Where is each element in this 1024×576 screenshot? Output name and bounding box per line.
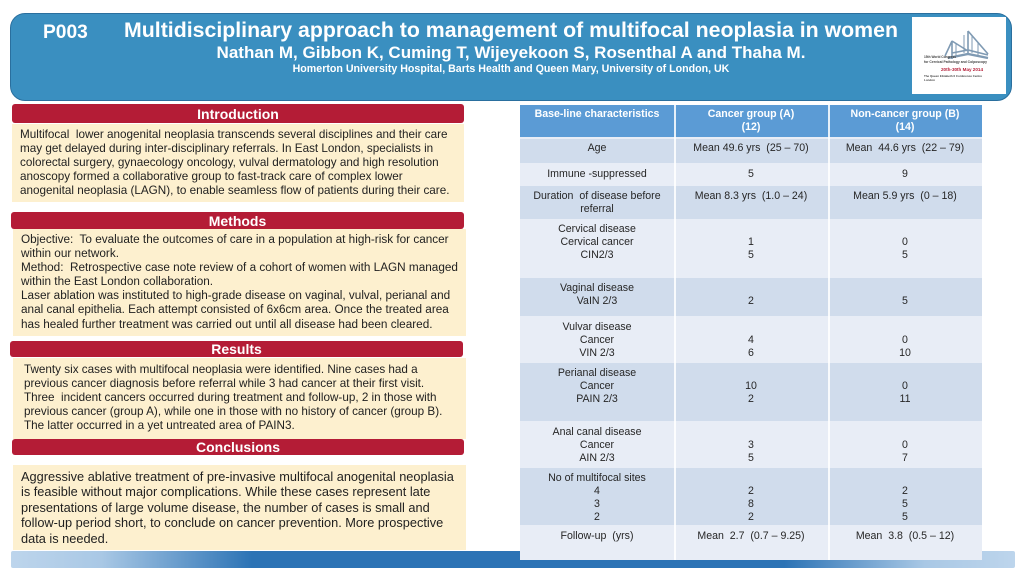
methods body	[21, 233, 458, 331]
heading: Introduction: Introduction	[197, 106, 279, 122]
row: multifocal sites: 3	[594, 498, 600, 510]
row: cervical disease: 5	[902, 249, 908, 261]
table: baseline characteristics	[520, 105, 982, 560]
row: perianal disease	[520, 363, 982, 421]
introduction body: may get delayed during inter-disciplinary referrals. In East London, specialists in	[20, 142, 433, 155]
heading: Introduction	[12, 104, 464, 123]
row: perianal disease: 0	[902, 380, 908, 392]
title: Multidisciplinary approach to management of multifocal neoplasia in women	[124, 18, 898, 42]
row: vaginal disease: VaIN 2/3	[577, 295, 617, 307]
row: vulvar disease: 4	[748, 334, 754, 346]
conference logo: London	[924, 78, 935, 82]
row: anal canal disease: 0	[902, 439, 908, 451]
row: vaginal disease: Vaginal disease	[560, 282, 634, 294]
row: vaginal disease: 5	[902, 295, 908, 307]
methods body: within the East London collaboration.	[21, 275, 213, 288]
conclusions body: follow-up period short, to conclude on cancer prevention. More prospective	[21, 515, 443, 530]
methods body: anal canal epithelia. Each attempt consisted of 6x6cm area. Once the treated area	[21, 303, 449, 316]
row: perianal disease: PAIN 2/3	[576, 393, 618, 405]
results body: previous cancer (group A), while one in those with no history of cancer (group B).	[24, 405, 442, 418]
row: follow-up: Mean 3.8 (0.5 – 12)	[856, 530, 954, 542]
row: anal canal disease: 7	[902, 452, 908, 464]
conclusions body: is feasible without major complications. While these cases represent late	[21, 484, 430, 499]
table header row: Non-cancer group (B)	[851, 108, 959, 120]
row: anal canal disease: 5	[748, 452, 754, 464]
authors: Nathan M, Gibbon K, Cuming T, Wijeyekoon S, Rosenthal A and Thaha M.	[217, 43, 805, 62]
panel: introduction text	[12, 124, 464, 202]
row: follow-up: Mean 2.7 (0.7 – 9.25)	[697, 530, 805, 542]
results body: Twenty six cases with multifocal neoplasia were identified. Nine cases had a	[24, 363, 418, 376]
row: vulvar disease: 6	[748, 347, 754, 359]
row: multifocal sites: 5	[902, 511, 908, 523]
table header row: Base-line characteristics	[535, 108, 659, 120]
conference logo: 20th-30th May 2014	[941, 67, 983, 72]
row: multifocal sites: 2	[594, 511, 600, 523]
heading: Methods: Methods	[209, 213, 266, 229]
methods body: within our network.	[21, 247, 119, 260]
row: anal canal disease	[520, 422, 982, 467]
conclusions body: Aggressive ablative treatment of pre-invasive multifocal anogenital neoplasia	[21, 469, 454, 484]
row: vulvar disease: VIN 2/3	[579, 347, 615, 359]
row: age: Age	[588, 142, 606, 154]
introduction body: colorectal surgery, gynaecology oncology, vulval dermatology and high resolution	[20, 156, 439, 169]
row: anal canal disease: Cancer	[580, 439, 614, 451]
row: duration: Mean 5.9 yrs (0 – 18)	[853, 190, 957, 202]
row: vaginal disease	[520, 278, 982, 316]
results body	[24, 363, 442, 432]
conclusions body: data is needed.	[21, 531, 108, 546]
row: duration: Duration of disease before	[533, 190, 661, 202]
results body: The latter occurred in a yet untreated area of PAIN3.	[24, 419, 295, 432]
introduction body: Multifocal lower anogenital neoplasia transcends several disciplines and their care	[20, 128, 447, 141]
row: cervical disease: 5	[748, 249, 754, 261]
row: cervical disease: 0	[902, 236, 908, 248]
conference logo	[912, 17, 1006, 94]
row: multifocal sites: 2	[748, 485, 754, 497]
conference logo: for Cervical Pathology and Colposcopy	[924, 60, 987, 64]
heading: Conclusions	[12, 439, 464, 455]
results body: Three incident cancers occurred during treatment and follow-up, 2 in those with	[24, 391, 437, 404]
row: multifocal sites: 2	[748, 511, 754, 523]
table header row: (12)	[742, 121, 760, 133]
header banner	[10, 13, 1012, 101]
introduction body: anogenital neoplasia (LAGN), to enable seamless flow of patients during their care.	[20, 184, 449, 197]
table header row: (14)	[896, 121, 914, 133]
methods body: Method: Retrospective case note review of a cohort of women with LAGN managed	[21, 261, 458, 274]
introduction body: anoscopy formed a collaborative group to fast-track care of complex lower	[20, 170, 403, 183]
icon: tower bridge	[945, 31, 988, 59]
introduction body	[20, 128, 449, 197]
row: age	[520, 139, 982, 163]
conclusions body: presentations of large volume disease, the number of cases is small and	[21, 500, 430, 515]
row: age: Mean 44.6 yrs (22 – 79)	[846, 142, 964, 154]
row: perianal disease: Cancer	[580, 380, 614, 392]
table header row: Cancer group (A)	[708, 108, 794, 120]
row: cervical disease: Cervical cancer	[560, 236, 634, 248]
affiliation: Homerton University Hospital, Barts Health and Queen Mary, University of London, UK	[293, 63, 729, 75]
footer gradient bar	[11, 551, 1015, 568]
row: duration: Mean 8.3 yrs (1.0 – 24)	[695, 190, 807, 202]
row: cervical disease	[520, 220, 982, 277]
heading: Methods	[11, 212, 464, 229]
methods body: Objective: To evaluate the outcomes of care in a population at high-risk for cancer	[21, 233, 449, 246]
row: vulvar disease: Cancer	[580, 334, 614, 346]
row: immune-suppressed: 9	[902, 168, 908, 180]
row: cervical disease: 1	[748, 236, 754, 248]
panel: methods text	[13, 229, 466, 336]
table header row	[520, 105, 982, 137]
row: perianal disease: Perianal disease	[558, 367, 636, 379]
conclusions body	[21, 469, 454, 546]
row: follow-up: Follow-up (yrs)	[560, 530, 634, 542]
methods body: has healed further treatment was carried out until all disease had been cleared.	[21, 318, 432, 331]
row: anal canal disease: 3	[748, 439, 754, 451]
row: anal canal disease: AIN 2/3	[579, 452, 615, 464]
results body: previous cancer diagnosis before referral while 3 had cancer at their first visit.	[24, 377, 424, 390]
row: multifocal sites: No of multifocal sites	[548, 472, 646, 484]
row: vulvar disease: 10	[899, 347, 911, 359]
panel: results text	[13, 358, 466, 439]
row: immune-suppressed	[520, 164, 982, 185]
conference logo: The Queen Elizabeth II Conference Centre	[924, 74, 982, 78]
row: vulvar disease: Vulvar disease	[562, 321, 632, 333]
row: duration	[520, 186, 982, 219]
row: duration: referral	[580, 203, 614, 215]
heading: Results: Results	[211, 341, 262, 357]
row: cervical disease: Cervical disease	[558, 223, 636, 235]
poster number: P003	[43, 22, 88, 43]
row: vulvar disease: 0	[902, 334, 908, 346]
row: vaginal disease: 2	[748, 295, 754, 307]
row: multifocal sites: 8	[748, 498, 754, 510]
row: follow-up	[520, 526, 982, 560]
row: age: Mean 49.6 yrs (25 – 70)	[693, 142, 809, 154]
row: multifocal sites: 4	[594, 485, 600, 497]
conference logo: 15th World Congress	[924, 55, 956, 59]
row: immune-suppressed: 5	[748, 168, 754, 180]
row: cervical disease: CIN2/3	[580, 249, 613, 261]
row: vulvar disease	[520, 317, 982, 362]
row: anal canal disease: Anal canal disease	[553, 426, 641, 438]
panel: conclusions text	[13, 465, 466, 550]
heading: Results	[10, 341, 463, 357]
row: multifocal sites: 2	[902, 485, 908, 497]
row: perianal disease: 10	[745, 380, 757, 392]
row: perianal disease: 11	[900, 393, 910, 405]
row: multifocal sites: 5	[902, 498, 908, 510]
row: perianal disease: 2	[748, 393, 754, 405]
row: immune-suppressed: Immune -suppressed	[547, 168, 647, 180]
methods body: Laser ablation was instituted to high-grade disease on vaginal, vulval, perianal and	[21, 289, 450, 302]
row: multifocal sites	[520, 468, 982, 525]
heading: Conclusions: Conclusions	[196, 439, 280, 455]
